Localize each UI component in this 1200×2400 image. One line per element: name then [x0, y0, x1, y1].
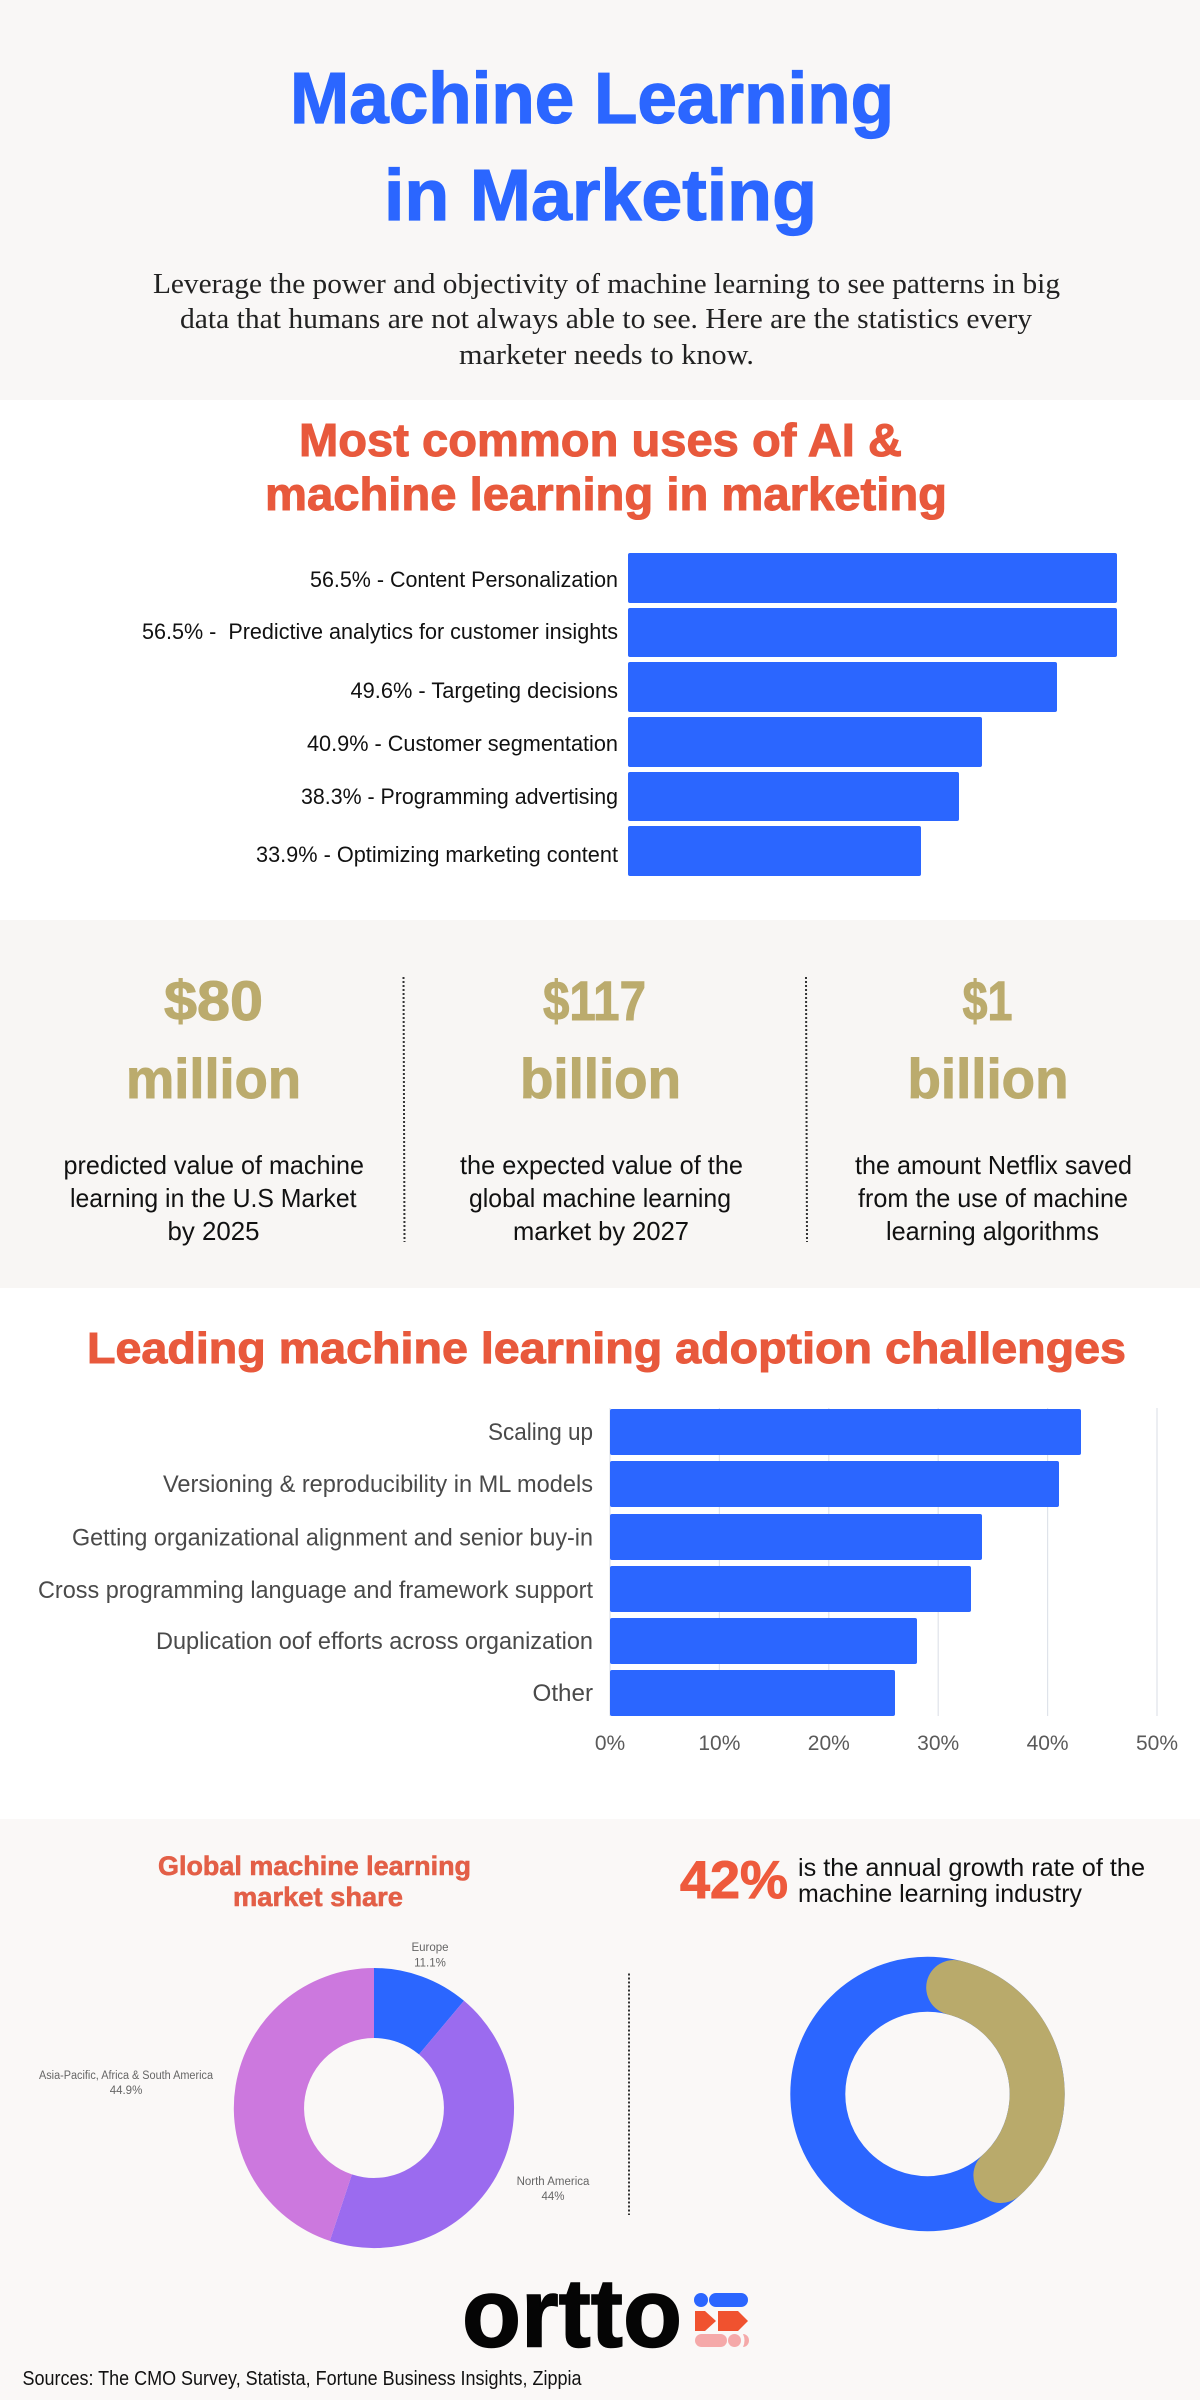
bar chart: challenges: 30% [917, 1732, 959, 1755]
donut chart: market share [39, 1942, 590, 2248]
bar chart: challenges: Getting organizational alignment and senior buy-in [72, 1524, 593, 1552]
donut chart: market share: 11.1% [414, 1958, 446, 1970]
donut chart: market share: Europe [411, 1942, 449, 1954]
panel: header [0, 0, 1200, 400]
panel: most common uses [0, 400, 1200, 920]
bar chart: uses: 56.5% - Predictive analytics for customer insights [142, 619, 618, 644]
stat: 117 billion: $117 [543, 969, 646, 1032]
bar chart: challenges: Versioning & reproducibility in ML models [163, 1471, 593, 1498]
heading: most common uses: machine learning in marketing [265, 468, 947, 520]
stat: 80 million: $80 [164, 969, 263, 1032]
bar chart: challenges: Cross programming language and framework support [38, 1577, 593, 1604]
donut chart: market share: North America [517, 2176, 590, 2188]
bar chart: challenges: Duplication oof efforts across organization [156, 1628, 593, 1655]
bar chart: challenges: 50% [1136, 1732, 1178, 1755]
panel: adoption challenges [0, 1288, 1200, 1819]
stat: 42 percent growth: is the annual growth rate of the [798, 1854, 1145, 1882]
donut chart: market share: Asia-Pacific, Africa & South America [39, 2070, 214, 2082]
bar chart: challenges: 10% [698, 1732, 740, 1755]
heading: global market share [158, 1851, 471, 1912]
title [290, 59, 894, 236]
sources: Sources: The CMO Survey, Statista, Fortune Business Insights, Zippia [22, 2368, 582, 2390]
heading: adoption challenges: Leading machine learning adoption challenges [87, 1324, 1126, 1373]
stat: 1 billion [855, 969, 1132, 1246]
stat: 42 percent growth [680, 1851, 1145, 1910]
stat: 80 million: predicted value of machine [64, 1150, 364, 1180]
bar chart: uses: 40.9% - Customer segmentation [307, 731, 618, 756]
intro paragraph: marketer needs to know. [459, 340, 754, 371]
bar chart: challenges [38, 1408, 1178, 1755]
intro paragraph [153, 269, 1060, 371]
bar chart: challenges: 0% [595, 1732, 625, 1755]
donut chart: market share: 44.9% [110, 2085, 142, 2097]
stat: 80 million [64, 969, 364, 1246]
title: in Marketing [384, 156, 817, 236]
stat: 80 million: million [126, 1047, 301, 1110]
stat: 1 billion: the amount Netflix saved [855, 1150, 1132, 1180]
stat: 1 billion: learning algorithms [886, 1216, 1099, 1246]
logo: ortto: ortto [462, 2258, 682, 2368]
bar chart: uses: 33.9% - Optimizing marketing content [256, 842, 618, 867]
bar chart: challenges: Scaling up [488, 1419, 593, 1446]
stat: 1 billion: from the use of machine [858, 1183, 1128, 1213]
stat: 42 percent growth: machine learning industry [798, 1880, 1082, 1908]
intro paragraph: data that humans are not always able to see. Here are the statistics every [180, 304, 1032, 335]
donut chart: 42 percent [818, 1984, 1037, 2204]
stat: 117 billion: billion [520, 1047, 681, 1110]
stat: 1 billion: billion [908, 1047, 1068, 1110]
heading: global market share: market share [233, 1882, 403, 1912]
bar chart: challenges: Other [532, 1680, 593, 1707]
stat: 117 billion: global machine learning [469, 1183, 731, 1213]
stat: 117 billion: market by 2027 [513, 1216, 689, 1246]
title: Machine Learning [290, 59, 894, 139]
heading: global market share: Global machine learning [158, 1851, 471, 1881]
bar chart: challenges: 20% [808, 1732, 850, 1755]
stat: 1 billion: $1 [962, 969, 1012, 1032]
stat: 80 million: learning in the U.S Market [70, 1183, 357, 1213]
bar chart: uses: 49.6% - Targeting decisions [350, 678, 618, 703]
bar chart: uses [142, 553, 1117, 876]
stat: 42 percent growth: 42% [680, 1851, 788, 1910]
intro paragraph: Leverage the power and objectivity of machine learning to see patterns in big [153, 269, 1060, 300]
bar chart: uses: 38.3% - Programming advertising [301, 784, 618, 809]
panel: key statistics [0, 920, 1200, 1288]
panel: market share and growth [0, 1819, 1200, 2400]
heading: most common uses [265, 414, 947, 520]
stat: 117 billion [460, 969, 743, 1246]
bar chart: challenges: 40% [1027, 1732, 1069, 1755]
stat: 117 billion: the expected value of the [460, 1150, 743, 1180]
bar chart: uses: 56.5% - Content Personalization [310, 567, 618, 592]
heading: most common uses: Most common uses of AI & [299, 414, 902, 466]
stat: 80 million: by 2025 [168, 1216, 260, 1246]
donut chart: market share: 44% [541, 2191, 565, 2203]
